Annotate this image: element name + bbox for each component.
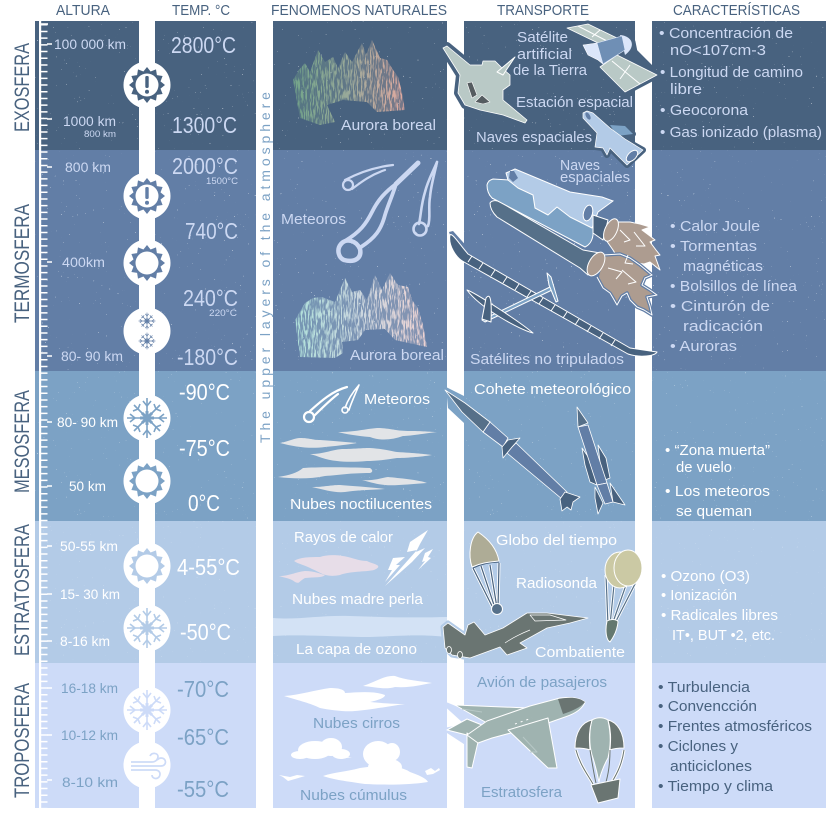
characteristics: thermosphere: • Cinturón de [670,298,770,315]
column headers: TRANSPORTE [497,2,589,19]
characteristics: mesosphere: • Los meteoros [665,483,770,500]
label: Satélites no tripulados [470,351,624,368]
temperature labels: 1500°C [206,176,238,187]
icon: fighter jet [443,613,588,658]
labels: satellite and station: artificial [517,46,572,63]
column headers: FENOMENOS NATURALES [271,2,447,19]
temperature labels: 240°C [183,285,238,311]
characteristics: stratosphere: • Radicales libres [661,607,778,624]
label: Nubes cirros [313,715,400,732]
characteristics: troposphere: • Turbulencia [658,679,751,696]
temperature labels: -70°C [177,676,229,702]
ozone layer band [273,616,447,637]
icon: hot sun warning, thermosphere [124,172,170,220]
label [560,157,630,186]
icon: sun, mesosphere [124,458,170,504]
icon: space shuttle with flames [487,169,660,315]
altitude labels: 400km [62,255,105,270]
temperature labels: 2000°C [172,153,238,179]
characteristics: exosphere: nO<107cm-3 [670,42,766,59]
characteristics: thermosphere [670,218,798,355]
altitude labels: 50-55 km [60,539,118,554]
label: Radiosonda [516,575,598,592]
icon: weather rockets [445,387,625,514]
temperature labels: 0°C [188,490,220,516]
column headers: TEMP. °C [172,2,230,19]
characteristics: exosphere: libre [670,81,702,98]
icon: two small snowflakes [124,308,170,354]
booster [490,201,600,275]
temperature labels: 2800°C [171,32,236,58]
altitude labels: 8-16 km [60,634,110,649]
temperature labels: 4-55°C [177,554,240,580]
icon: small spacecraft [583,111,643,165]
label: La capa de ozono [296,641,417,658]
icon: snowflake, stratosphere [124,604,170,652]
icon: three meteors, thermosphere [338,162,437,261]
temperature labels [171,32,240,802]
noctilucent clouds [278,428,437,492]
characteristics: troposphere: • Tiempo y clima [658,778,774,795]
panel: natural phenomena [273,40,447,804]
engine bells [593,215,608,240]
icon: wind [124,742,170,788]
label: Meteoros [364,391,430,408]
characteristics: mesosphere: • “Zona muerta” [665,442,770,459]
label: Avión de pasajeros [477,674,607,691]
icon: passenger airliner [447,697,585,768]
panel: transport [443,24,660,803]
column headers: ALTURA [56,2,110,19]
icon: hot sun warning, exosphere [124,62,170,108]
characteristics: troposphere [658,679,812,795]
characteristics: mesosphere: de vuelo [676,459,732,476]
altitude labels: 800 km [84,129,116,140]
label: Aurora boreal [350,347,444,364]
aurora boreal, exosphere [293,40,405,125]
characteristics: exosphere: • Gas ionizado (plasma) [660,124,822,141]
layer names (vertical): EXOSFERA [11,43,34,132]
characteristics: troposphere: anticiclones [670,758,752,775]
labels: satellite and station: de la Tierra [513,62,588,79]
icon: radiosonde [605,550,642,642]
icon: weather balloon [470,532,502,614]
altitude labels: 15- 30 km [60,587,120,602]
icon: sun, stratosphere [124,542,170,590]
wing [487,179,593,247]
characteristics: thermosphere: • Calor Joule [670,218,760,235]
label: Cohete meteorológico [474,381,631,398]
label: Nubes madre perla [292,591,424,608]
label: Nubes noctilucentes [290,496,432,513]
flames [606,222,660,270]
characteristics: mesosphere [665,442,770,520]
orbiter body [506,169,613,228]
icon: snowflake, mesosphere [124,394,170,442]
altitude labels [54,37,126,790]
cirrus clouds [284,676,432,711]
mother-of-pearl clouds [279,555,378,583]
characteristics: stratosphere: • Ozono (O3) [661,568,750,585]
characteristics: troposphere: • Convencción [658,698,757,715]
temperature labels: -55°C [177,776,229,802]
temperature labels: 740°C [185,218,238,244]
label: espaciales [560,169,630,186]
icon: heat lightning bolts [385,530,433,586]
icon: space station [443,46,527,123]
side caption: The upper layers of the atmosphere [257,92,273,443]
label: Globo del tiempo [496,532,617,549]
characteristics: exosphere: • Concentración de [659,25,793,42]
characteristics: thermosphere: • Bolsillos de línea [670,278,798,295]
altitude labels: 800 km [65,160,111,175]
labels: satellite and station [476,29,633,146]
characteristics: exosphere: • Longitud de camino [660,64,803,81]
cumulus clouds [279,738,440,785]
characteristics: exosphere: • Geocorona [660,102,749,119]
layer names (vertical): TERMOSFERA [11,204,34,323]
layer names (vertical): MESOSFERA [11,390,34,493]
icon: sun, thermosphere [124,240,170,286]
label: Estratosfera [481,784,563,801]
altitude labels: 80- 90 km [61,349,123,364]
characteristics: stratosphere: • Ionización [661,587,737,604]
temperature labels: -180°C [177,344,238,370]
labels: satellite and station: Naves espaciales [476,129,592,146]
layer names (vertical): TROPOSFERA [11,683,34,798]
altitude labels: 1000 km [63,114,116,129]
label: Meteoros [281,211,346,228]
altitude scale ruler [39,21,52,808]
characteristics: stratosphere: IT•, BUT •2, etc. [672,627,775,644]
temperature labels: 1300°C [172,112,237,138]
characteristics: stratosphere [661,568,778,644]
column headers: CARACTERÍSTICAS [673,2,800,19]
characteristics: troposphere: • Frentes atmosféricos [658,718,812,735]
altitude labels: 50 km [69,479,106,494]
labels: satellite and station: Satélite [517,29,568,46]
icon: satellite [567,24,657,92]
layer names (vertical): ESTRATOSFERA [11,524,34,656]
altitude labels: 100 000 km [54,37,126,52]
altitude labels: 10-12 km [61,728,118,743]
temperature labels: -50°C [180,619,231,645]
temperature labels: -65°C [177,724,229,750]
icon: snowflake, troposphere [124,686,170,734]
characteristics: thermosphere: radicación [683,318,763,335]
label: Aurora boreal [341,117,436,134]
characteristics: mesosphere: se queman [676,503,752,520]
icon: unmanned glider [449,231,657,356]
aurora boreal, thermosphere [295,273,427,358]
temperature labels: -75°C [179,435,230,461]
layer names (vertical) [11,43,34,798]
altitude labels: 16-18 km [61,681,118,696]
column headers [56,2,800,19]
characteristics: thermosphere: • Auroras [670,338,737,355]
labels: satellite and station: Estación espacial [516,94,633,111]
label: Nubes cúmulus [300,787,407,804]
label: Naves [560,157,600,174]
altitude labels: 80- 90 km [57,415,118,430]
characteristics: thermosphere: magnéticas [683,258,763,275]
altitude labels: 8-10 km [62,775,118,790]
label: Combatiente [535,644,625,661]
characteristics: thermosphere: • Tormentas [670,238,757,255]
characteristics: troposphere: • Ciclones y [658,738,738,755]
label: Rayos de calor [294,529,393,546]
temperature labels: -90°C [179,379,230,405]
icon: hot air balloon [575,718,624,803]
temperature labels: 220°C [209,308,237,319]
icon: meteors, mesosphere [304,385,359,422]
characteristics: exosphere [659,25,822,141]
